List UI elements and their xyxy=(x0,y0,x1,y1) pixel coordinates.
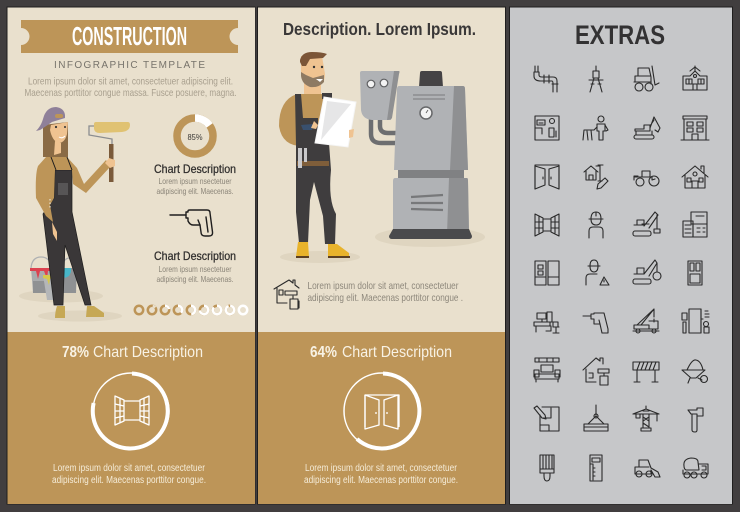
heading: Description. Lorem Ipsum. xyxy=(283,19,476,39)
icon: door xyxy=(365,395,399,429)
icon: tower crane xyxy=(633,406,659,431)
panel: construction left xyxy=(6,6,256,504)
lid xyxy=(419,71,443,87)
head and hat xyxy=(43,122,68,157)
bottom text: adipiscing elit. Maecenas porttitor congue. xyxy=(52,475,206,486)
lower body xyxy=(393,178,469,229)
boots xyxy=(296,242,309,257)
torso xyxy=(279,94,336,146)
icon: hammer xyxy=(688,408,703,432)
icon: door and fittings xyxy=(682,309,709,333)
description text: adipiscing elit. Maecenas porttitor congue . xyxy=(308,292,463,304)
boots xyxy=(55,306,65,318)
bottom text: adipiscing elit. Maecenas porttitor congue. xyxy=(304,475,458,486)
donut chart 85% xyxy=(177,118,213,154)
bottom stat: 78%: 78% xyxy=(62,344,89,361)
icon: open window xyxy=(535,214,559,236)
panel: extras xyxy=(509,6,733,504)
icon: hand drill xyxy=(583,313,608,333)
chart description 1: Chart Description xyxy=(154,162,236,176)
waist xyxy=(398,170,464,178)
bottom text xyxy=(52,463,206,486)
icon: buildings xyxy=(683,212,707,237)
bottom text: Lorem ipsum dolor sit amet, consectetuer xyxy=(53,463,206,474)
icon: drill xyxy=(170,210,213,236)
icon: wrecking crane xyxy=(633,260,661,284)
icon: road barrier xyxy=(633,362,659,382)
icon: office desk xyxy=(534,312,559,333)
bottom text: Lorem ipsum dolor sit amet, consectetuer xyxy=(305,463,458,474)
hands xyxy=(52,222,57,241)
icon: window xyxy=(115,396,149,425)
icon: forklift xyxy=(634,66,659,91)
chart description 2: Chart Description xyxy=(154,249,236,263)
icon: floor plan xyxy=(535,116,559,140)
chart description 1 xyxy=(154,162,236,196)
icon: pipe xyxy=(534,66,558,92)
icon: wheelbarrow xyxy=(682,360,708,383)
icon: school building xyxy=(683,66,707,90)
donut chart 85%: 85% xyxy=(188,132,203,142)
title ribbon: CONSTRUCTION xyxy=(72,21,187,51)
icon: door panel xyxy=(688,261,702,285)
bottom stat: 64%: Chart Description xyxy=(342,344,452,361)
icon: worker with helmet xyxy=(589,212,603,238)
icon: compass xyxy=(589,66,603,92)
icon: double door xyxy=(535,165,559,189)
icon: apartment block xyxy=(681,116,709,140)
intro text: Maecenas porttitor congue massa. Fusce posuere, magna. xyxy=(24,87,236,99)
icon: blueprint xyxy=(534,406,559,431)
progress ring: 64% xyxy=(344,373,420,449)
icon: living room xyxy=(534,358,560,382)
icon: cement mixer xyxy=(683,458,708,478)
neck and head xyxy=(304,80,321,94)
description text: Lorem ipsum dolor sit amet, consectetuer xyxy=(308,280,459,292)
icon: crane truck xyxy=(633,309,659,333)
icon: suspended beam xyxy=(584,405,608,431)
icon: kitchen cabinets xyxy=(535,261,559,285)
intro text xyxy=(24,76,236,99)
icon: house renovation small xyxy=(583,358,609,385)
extras heading: EXTRAS xyxy=(575,20,665,50)
bottom stat: 78%: Chart Description xyxy=(93,344,203,361)
legs and overalls xyxy=(43,170,91,305)
chart description 2: adipiscing elit. Maecenas. xyxy=(156,274,234,284)
icon: hand saw xyxy=(590,455,602,481)
icon: house and pencil xyxy=(584,165,608,189)
clipboard xyxy=(315,97,356,147)
illustration: man with clipboard xyxy=(279,52,360,263)
icon: worker with rake xyxy=(583,116,608,140)
illustration: boiler xyxy=(360,71,485,247)
chart description 2: Lorem ipsum nsectetuer xyxy=(158,264,232,274)
control box xyxy=(360,71,399,120)
intro text: Lorem ipsum dolor sit amet, consectetuer adipiscing elit. xyxy=(28,76,233,88)
roller xyxy=(89,122,130,182)
chart description 1: adipiscing elit. Maecenas. xyxy=(156,186,234,196)
pipes xyxy=(371,118,396,143)
icon: worker hazard xyxy=(586,260,609,285)
progress dots xyxy=(135,305,247,315)
icon: house xyxy=(682,166,708,188)
buttons xyxy=(49,199,51,208)
icon: skid loader xyxy=(635,460,660,477)
icon: excavator xyxy=(634,117,660,139)
title ribbon xyxy=(21,20,238,53)
chart description 2 xyxy=(154,249,236,284)
progress ring: 78% xyxy=(93,373,169,449)
paint cans xyxy=(30,257,77,300)
chart description 1: Lorem ipsum nsectetuer xyxy=(158,176,232,186)
icon: road roller xyxy=(634,171,659,186)
shirt and arms xyxy=(36,157,110,222)
description text xyxy=(308,280,463,304)
bottom stat: 64%: 64% xyxy=(310,344,337,361)
bottom text xyxy=(304,463,458,486)
icon: paint brush xyxy=(540,455,554,481)
icon: crawler crane xyxy=(633,212,660,236)
icon: house renovation xyxy=(274,280,299,309)
illustration: woman with paint roller xyxy=(19,107,130,322)
legs xyxy=(296,143,336,244)
upper body xyxy=(394,86,468,170)
subtitle: INFOGRAPHIC TEMPLATE xyxy=(54,60,205,71)
panel: description centre xyxy=(257,6,506,504)
